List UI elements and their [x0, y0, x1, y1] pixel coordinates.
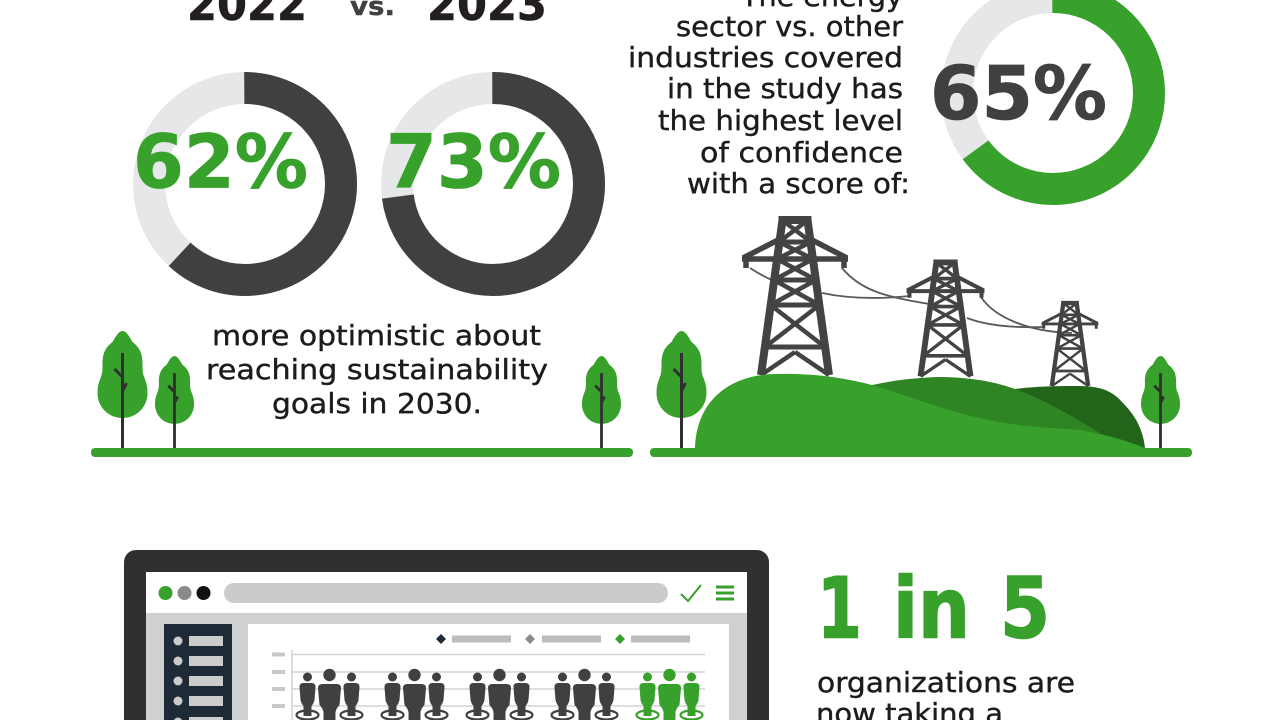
- power lines: [750, 268, 1072, 333]
- people group 2: [382, 669, 448, 720]
- text block: energy sector: with a score of:: [687, 167, 910, 200]
- front hill: [695, 374, 1145, 448]
- icon: tree left of hills: [656, 331, 706, 448]
- sidebar: [164, 624, 232, 720]
- people group 3: [466, 669, 532, 720]
- middle hill: [872, 377, 1100, 440]
- text block: more optimistic: goals in 2030.: [272, 387, 482, 420]
- donut chart: 73%: [386, 88, 589, 280]
- text block: organizations: organizations are: [817, 666, 1075, 699]
- stat: 1 in 5: [817, 560, 1050, 658]
- text block: energy sector: in the study has: [667, 72, 903, 105]
- people group 4: [552, 669, 618, 720]
- icon: large pylon: [742, 220, 848, 375]
- icon: small pylon: [1042, 303, 1098, 386]
- text block: energy sector: sector vs. other: [676, 10, 903, 43]
- text block: more optimistic: [206, 319, 548, 420]
- heading: 2022 vs. 2023: [187, 0, 547, 31]
- icon: medium pylon: [907, 262, 984, 376]
- donut chart: 62%: [133, 88, 341, 280]
- text block: energy sector: of confidence: [700, 136, 903, 169]
- chart panel: [248, 624, 729, 720]
- donut chart: 65%: [930, 0, 1149, 189]
- text block: energy sector: [628, 0, 910, 200]
- text block: more optimistic: reaching sustainability: [206, 353, 548, 386]
- stat: 1 in 5: 1: [817, 560, 862, 658]
- browser header: [146, 572, 747, 613]
- icon: right small tree: [582, 356, 621, 448]
- chart legend: [436, 634, 690, 644]
- donut chart: 62%: 62%: [133, 120, 308, 206]
- text block: energy sector: industries covered: [628, 41, 903, 74]
- icon: small tree: [155, 356, 194, 448]
- icon: large tree: [98, 331, 148, 448]
- stat: 1 in 5: in: [893, 560, 970, 658]
- panel: laptop dashboard: [124, 550, 769, 720]
- chart grid: [272, 650, 705, 720]
- left ground scene with trees: [91, 331, 633, 457]
- text block: organizations: [816, 666, 1075, 720]
- text block: energy sector: the highest level: [658, 104, 903, 137]
- stat: 1 in 5: 5: [1000, 560, 1050, 658]
- darkest hill: [1015, 386, 1145, 448]
- icon: tree right of hills: [1141, 356, 1180, 448]
- people group 5 highlighted: [636, 669, 702, 720]
- right ground with hills and trees: [650, 331, 1192, 457]
- people group 1: [296, 669, 362, 720]
- donut chart: 73%: 73%: [386, 120, 561, 206]
- text block: more optimistic: more optimistic about: [212, 319, 541, 352]
- donut chart: 65%: 65%: [930, 51, 1107, 137]
